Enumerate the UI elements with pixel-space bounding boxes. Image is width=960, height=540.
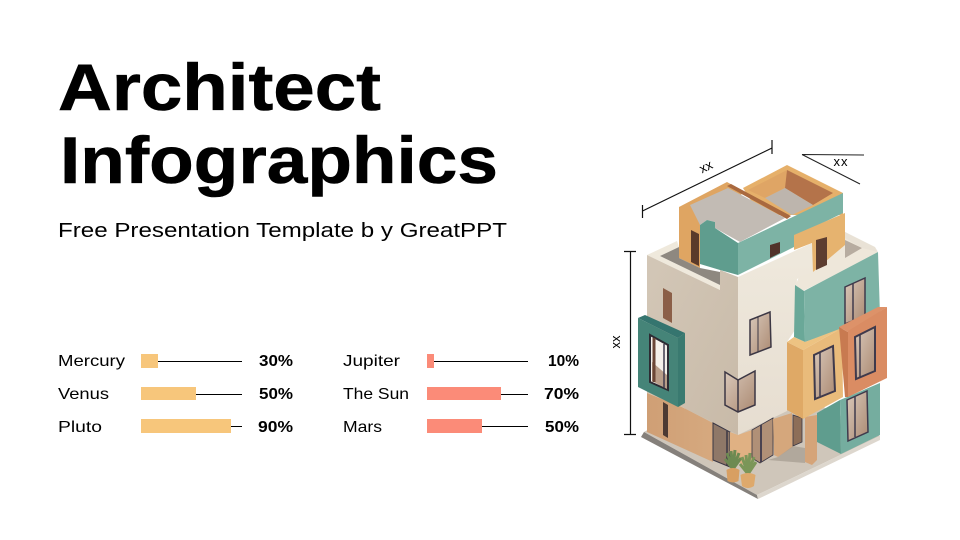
- row: Mercury 30%: Mercury: [58, 353, 125, 370]
- dimension: roof angle: xx: [834, 154, 848, 169]
- row: Pluto 90%: Pluto: [58, 419, 102, 436]
- row: Mercury 30%: [58, 353, 293, 370]
- dimension: roof angle: [802, 154, 864, 184]
- ground floor: wood left wall: [647, 393, 730, 467]
- title: Architect: [58, 50, 381, 124]
- window: first floor corner: [725, 371, 755, 412]
- bar chart: left column: [58, 353, 293, 436]
- upper volume: orange side wall: [679, 182, 745, 268]
- illustration: isometric building: [638, 165, 887, 499]
- wood column: [805, 415, 817, 465]
- window: upper left wall: [663, 288, 672, 323]
- row: Jupiter 10%: 10%: [548, 353, 579, 370]
- potted plants: [725, 450, 756, 488]
- row: Venus 50%: Venus: [58, 386, 109, 403]
- dimension: building width: [642, 140, 772, 218]
- dimension: building height: [608, 251, 636, 434]
- main cream volume: left face: [647, 255, 738, 435]
- lower teal corner block: [817, 383, 880, 454]
- row: Venus 50%: 50%: [259, 386, 293, 403]
- upper volume: teal walls: [691, 193, 843, 275]
- window: second floor right wall: [750, 312, 771, 355]
- rear roof terrace: cream parapet: [795, 232, 878, 291]
- floor shadow: [768, 446, 805, 463]
- row: Mars 50%: 50%: [545, 419, 579, 436]
- bar chart: right column: [343, 353, 579, 436]
- upper volume: roof slab: [690, 184, 791, 242]
- row: The Sun 70%: [343, 386, 579, 403]
- title: [58, 50, 498, 197]
- dimension: building height: xx: [608, 335, 623, 348]
- right teal volume: [794, 252, 880, 342]
- row: Pluto 90%: [58, 419, 293, 436]
- row: Jupiter 10%: [343, 353, 579, 370]
- row: Pluto 90%: 90%: [258, 419, 293, 436]
- base slab: [641, 395, 880, 499]
- row: Venus 50%: [58, 386, 293, 403]
- main cream volume: right face: [738, 243, 812, 435]
- title: Infographics: [60, 123, 498, 197]
- row: Mercury 30%: 30%: [259, 353, 293, 370]
- terrace parapet and floor: [647, 241, 720, 290]
- upper volume: small orange block: [794, 213, 845, 272]
- row: The Sun 70%: 70%: [544, 386, 579, 403]
- row: Jupiter 10%: Jupiter: [343, 353, 401, 370]
- orange bay window: [787, 328, 843, 419]
- ground floor: entrance and glazing: [730, 413, 802, 465]
- row: Mars 50%: [343, 419, 579, 436]
- row: The Sun 70%: The Sun: [343, 386, 409, 403]
- dimension: building width: xx: [697, 157, 715, 176]
- row: Mars 50%: Mars: [343, 419, 382, 436]
- upper volume: back room: [743, 165, 843, 215]
- teal bay window on left: [638, 315, 685, 407]
- subtitle: Free Presentation Template b y GreatPPT: [58, 220, 507, 242]
- cream wall windows: [663, 288, 771, 412]
- terracotta bay window: [839, 307, 887, 397]
